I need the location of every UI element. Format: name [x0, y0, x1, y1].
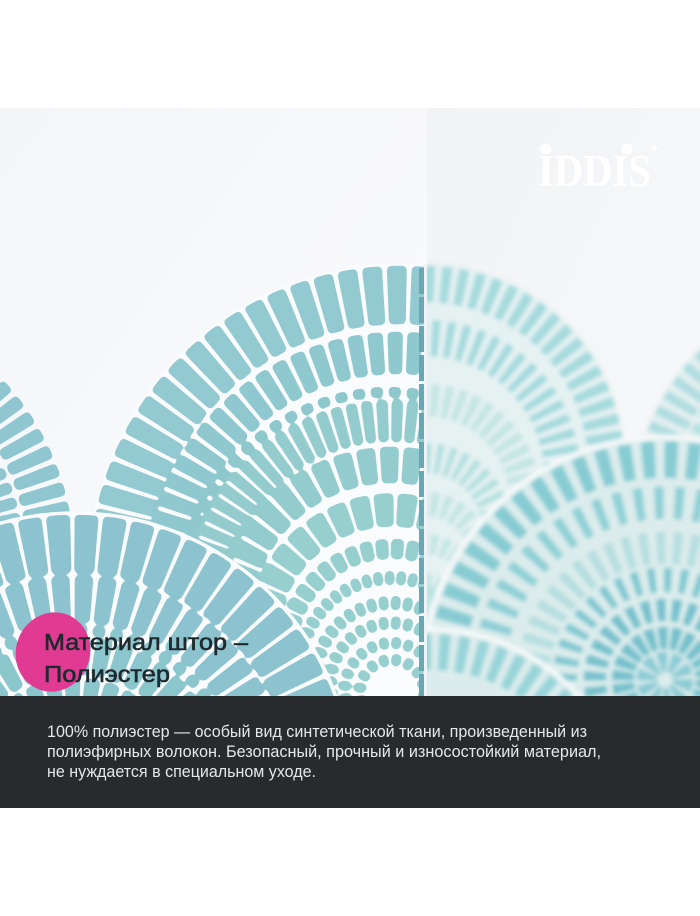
pink blob accent: [5, 602, 101, 702]
pattern fan: large centre: [96, 266, 424, 696]
blurred fan: upper centre: [427, 262, 624, 625]
pattern fan: lower left: [0, 511, 338, 696]
title: material: [44, 629, 249, 687]
dark description band: [0, 696, 700, 808]
description text: полиэфирных волокон. Безопасный, прочный и износостойкий материал,: [47, 743, 601, 761]
pattern fan: upper left: [0, 382, 70, 522]
description text: 100% полиэстер — особый вид синтетической ткани, произведенный из: [47, 723, 587, 741]
curtain fold edge: [422, 264, 427, 696]
blurred fan: top right: [645, 347, 700, 438]
title: material: Материал штор –: [44, 629, 249, 655]
description text: не нуждается в специальном уходе.: [47, 763, 316, 781]
title: material: Полиэстер: [44, 661, 170, 687]
blurred fan: lower left: [427, 625, 584, 696]
right photo panel: translucent curtain: [427, 108, 700, 696]
blurred fan: lower right: [427, 432, 700, 696]
left photo panel: fabric close-up: [0, 108, 427, 696]
logo: IDDIS: IDDIS: [538, 146, 651, 196]
description text: [47, 723, 601, 781]
